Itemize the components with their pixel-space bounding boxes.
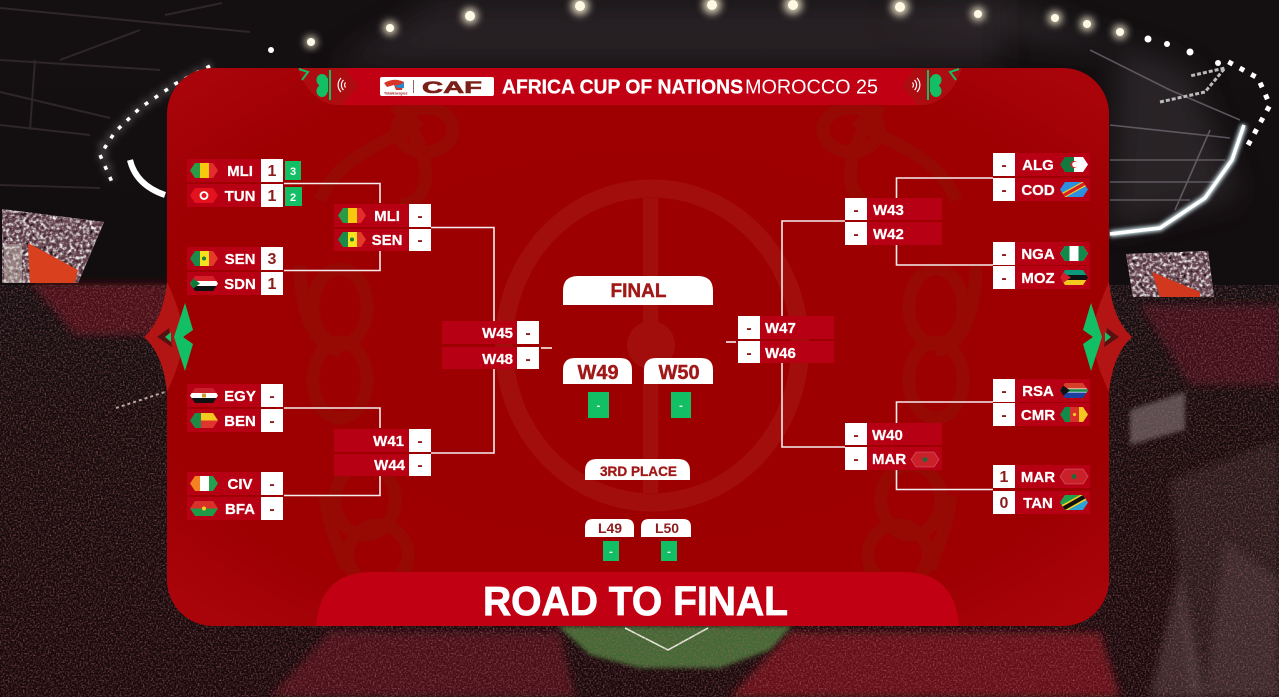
final heading tab <box>563 276 713 305</box>
match row: SEN: SEN <box>225 251 255 268</box>
match row: SDN <box>187 272 283 295</box>
match row: TUN <box>187 184 302 207</box>
match row: CMR: CMR <box>1021 407 1055 424</box>
final block <box>563 276 713 418</box>
match row: W41 <box>334 429 431 452</box>
match row: CIV: - <box>269 476 275 493</box>
left video screen <box>2 209 104 283</box>
match row: SEN <box>187 247 283 270</box>
final score W49 <box>588 392 609 418</box>
match row: RSA: RSA <box>1022 383 1054 400</box>
match row: W47: - <box>746 320 752 337</box>
match row: W45: W45 <box>482 325 513 342</box>
match row: MAR <box>993 465 1090 488</box>
main red panel <box>167 68 1109 626</box>
match row: NGA <box>993 242 1090 265</box>
match row: W40: W40 <box>872 427 903 444</box>
match row: EGY: - <box>269 388 275 405</box>
crowd texture <box>0 285 1279 697</box>
match row: W40 <box>845 423 942 445</box>
match row: CIV: CIV <box>227 476 253 493</box>
finalist W50 <box>644 358 713 384</box>
match row: CMR: - <box>1001 407 1007 424</box>
match row: NGA: NGA <box>1021 246 1055 263</box>
left quarter-finals <box>334 204 431 476</box>
pitch <box>558 626 792 668</box>
title: AFRICA CUP OF NATIONS <box>502 76 743 98</box>
right video screen <box>1126 251 1214 297</box>
match row: NGA: - <box>1001 246 1007 263</box>
match row: MLI: - <box>417 208 423 225</box>
match row: MLI <box>334 204 431 227</box>
third place score L50: - <box>667 546 671 558</box>
match row: BFA: BFA <box>225 501 255 518</box>
final heading tab: FINAL <box>611 281 667 302</box>
match row: TUN: 2 <box>290 192 296 204</box>
CAF logo plate: CAF <box>422 78 482 97</box>
header band <box>298 68 962 105</box>
finalist W49 <box>563 358 632 384</box>
match row: TAN: 0 <box>1000 495 1009 512</box>
stadium light ring <box>100 0 1270 234</box>
right round of 16, bottom <box>993 379 1090 514</box>
match row: W43 <box>845 198 942 220</box>
match row: COD <box>993 178 1090 201</box>
match row: EGY: EGY <box>224 388 256 405</box>
third place L49: L49 <box>598 520 622 536</box>
match row: SEN: 3 <box>268 251 277 268</box>
road to final banner <box>316 572 959 626</box>
roof structure <box>0 0 1240 230</box>
match row: W48 <box>442 347 539 369</box>
third place block <box>585 459 691 561</box>
red seating and crowd areas <box>30 283 1279 697</box>
match row: COD: COD <box>1021 182 1055 199</box>
panel watermark: centre circle and chains <box>300 105 976 585</box>
bracket connector lines <box>284 178 993 496</box>
right header ornament <box>912 69 959 100</box>
right side notch ornament <box>1083 282 1132 392</box>
match row: MAR <box>845 447 942 470</box>
match row: MOZ <box>993 266 1090 289</box>
match row: SEN: SEN <box>372 232 402 249</box>
match row: BFA: - <box>269 501 275 518</box>
match row: MAR: 1 <box>1000 469 1009 486</box>
road to final banner: ROAD TO FINAL <box>483 578 788 624</box>
match row: TAN: TAN <box>1023 495 1053 512</box>
match row: MLI: 3 <box>290 166 296 178</box>
match row: W45 <box>442 321 539 344</box>
match row: ALG: - <box>1001 157 1007 174</box>
match row: W47: W47 <box>765 320 796 337</box>
match row: W48: - <box>525 351 531 368</box>
match row: TUN: 1 <box>268 188 277 205</box>
match row: W44: - <box>417 457 423 474</box>
match row: MAR: MAR <box>1021 469 1055 486</box>
match row: ALG <box>993 153 1090 176</box>
match row: MLI <box>187 159 301 182</box>
right quarter-finals <box>845 198 942 470</box>
right round of 16, top <box>993 153 1090 289</box>
match row: SEN <box>334 229 431 251</box>
match row: EGY <box>187 384 283 407</box>
match row: BEN: - <box>269 413 275 430</box>
final score W50: - <box>679 400 683 412</box>
third place heading tab: 3RD PLACE <box>600 463 677 479</box>
match row: SDN: 1 <box>268 276 277 293</box>
CAF logo plate: TotalEnergies <box>384 92 408 96</box>
left round of 16, bottom <box>187 384 283 520</box>
match row: MOZ: - <box>1001 270 1007 287</box>
match row: BEN: BEN <box>224 413 256 430</box>
match row: W46 <box>738 341 834 363</box>
match row: COD: - <box>1001 182 1007 199</box>
right semi-final <box>738 316 834 363</box>
match row: BFA <box>187 497 283 520</box>
match row: ALG: ALG <box>1022 157 1054 174</box>
match row: W40: - <box>853 427 859 444</box>
match row: TUN: TUN <box>225 188 255 205</box>
match row: W45: - <box>525 325 531 342</box>
match row: W44 <box>334 454 431 476</box>
match row: W47 <box>738 316 834 339</box>
match row: W42 <box>845 222 942 245</box>
left header ornament <box>299 69 346 100</box>
match row: W46: - <box>746 345 752 362</box>
left side notch ornament <box>144 282 193 392</box>
left semi-final <box>442 321 539 369</box>
match row: MAR: MAR <box>872 451 906 468</box>
match row: MLI: 1 <box>268 163 277 180</box>
third place score L49: - <box>609 546 613 558</box>
match row: W48: W48 <box>482 351 513 368</box>
left round of 16, top <box>187 159 302 295</box>
match row: W41: - <box>417 433 423 450</box>
match row: SEN: - <box>417 232 423 249</box>
match row: MAR: - <box>853 451 859 468</box>
match row: MLI: MLI <box>374 208 400 225</box>
match row: W46: W46 <box>765 345 796 362</box>
finalist W49: W49 <box>577 362 619 384</box>
CAF logo plate <box>380 77 494 97</box>
match row: RSA: - <box>1001 383 1007 400</box>
match row: CMR <box>993 403 1090 426</box>
third place L50: L50 <box>655 520 679 536</box>
match row: W44: W44 <box>374 457 406 474</box>
final score W49: - <box>597 400 601 412</box>
match row: BEN <box>187 409 283 432</box>
match row: MOZ: MOZ <box>1021 270 1055 287</box>
subtitle: MOROCCO 25 <box>745 76 878 98</box>
finalist W50: W50 <box>658 362 700 384</box>
match row: SDN: SDN <box>224 276 256 293</box>
match row: W43: W43 <box>873 202 904 219</box>
match row: RSA <box>993 379 1090 402</box>
match row: TAN <box>993 491 1090 514</box>
match row: MLI: MLI <box>227 163 253 180</box>
match row: W42: - <box>853 226 859 243</box>
final score W50 <box>671 392 691 418</box>
match row: W43: - <box>853 202 859 219</box>
match row: W41: W41 <box>373 433 404 450</box>
match row: CIV <box>187 472 283 495</box>
match row: W42: W42 <box>873 226 904 243</box>
